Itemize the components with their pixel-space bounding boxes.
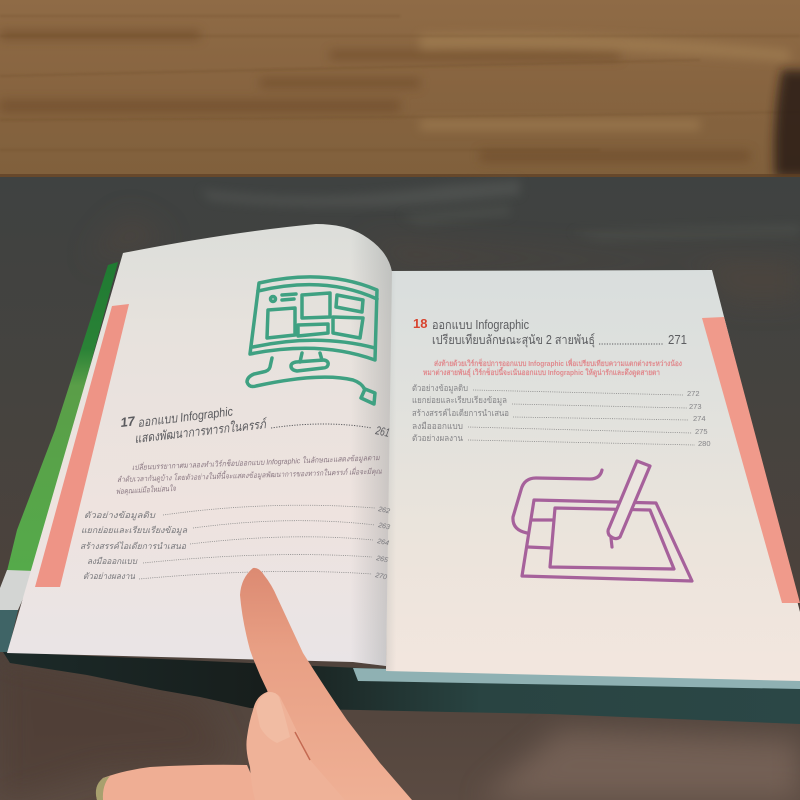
wood wall background [0, 0, 800, 177]
contents list chapter 18 [412, 383, 711, 448]
contents list chapter 17: ลงมือออกแบบ [87, 556, 138, 566]
contents list chapter 18: ตัวอย่างผลงาน [412, 433, 463, 443]
text block: chapter 18 intro: ส่งท้ายด้วยเวิร์กช็อปการออกแบบ Infographic เพื่อเปรียบเทียบความแตกต่างระหว่างน้อง [434, 357, 682, 368]
icon: drawing tablet and pen [513, 461, 692, 581]
contents list chapter 17: สร้างสรรค์ไอเดียการนำเสนอ [80, 541, 187, 551]
contents list chapter 17: 264 [376, 538, 390, 547]
text block: chapter 17 intro [116, 452, 383, 496]
heading: chapter 17: ออกแบบ Infographic [137, 404, 234, 430]
pink stripe right [702, 317, 800, 603]
contents list chapter 18: 280 [698, 439, 711, 448]
cover green edge left [7, 262, 118, 572]
panel: left page [7, 224, 392, 666]
heading: chapter 17 [120, 404, 391, 446]
contents list chapter 17 [80, 505, 391, 581]
hand with pointing finger [96, 568, 412, 800]
panel: right page [386, 270, 800, 681]
book cover and shadow [0, 262, 800, 724]
contents list chapter 18: 275 [695, 427, 708, 436]
text block: chapter 17 intro: ลำดับเวลากันดูบ้าง โดยตัวอย่างในที่นี้จะแสดงข้อมูลพัฒนาการของทารกในครรภ์ เผื่อจะมีคุณ [117, 466, 383, 484]
contents list chapter 17: แยกย่อยและเรียบเรียงข้อมูล [81, 525, 188, 536]
cover teal edge right [353, 668, 800, 689]
heading: chapter 18: 18 [413, 316, 427, 331]
shadow under book [3, 652, 800, 724]
contents list chapter 17: 270 [374, 572, 388, 581]
heading: chapter 18: ออกแบบ Infographic [432, 318, 529, 332]
brown floor lower right [480, 730, 800, 800]
contents list chapter 17: 265 [375, 555, 389, 564]
text block: chapter 18 intro [423, 357, 682, 378]
fingernail on second finger [256, 692, 290, 743]
second finger [246, 692, 345, 800]
heading: chapter 18: เปรียบเทียบลักษณะสุนัข 2 สายพันธุ์ [432, 333, 595, 348]
contents list chapter 18: แยกย่อยและเรียบเรียงข้อมูล [412, 395, 507, 406]
contents list chapter 17: 262 [377, 506, 391, 515]
contents list chapter 18: ลงมือออกแบบ [412, 421, 463, 431]
text block: chapter 18 intro: หมาต่างสายพันธุ์ เวิร์กช็อปนี้จะเน้นออกแบบ Infographic ให้ดูน่ารักและดึงดูดสายตา [423, 366, 660, 378]
fingernail on bottom finger [96, 776, 110, 800]
contents list chapter 18: ตัวอย่างข้อมูลดิบ [412, 383, 468, 394]
contents list chapter 17: ตัวอย่างข้อมูลดิบ [84, 510, 156, 521]
heading: chapter 17: 261 [374, 423, 391, 440]
text block: chapter 17 intro: เปลี่ยนบรรยากาศมาลองทำเวิร์กช็อปออกแบบ Infographic ในลักษณะแสดงข้อมูลตาม [132, 452, 381, 472]
heading: chapter 17: แสดงพัฒนาการทารกในครรภ์ [134, 416, 269, 446]
heading: chapter 17: 17 [120, 413, 136, 430]
contents list chapter 18: 272 [687, 389, 700, 398]
page block left [0, 570, 35, 610]
index finger [240, 568, 412, 800]
text block: chapter 17 intro: พ่อคุณแม่มือใหม่สนใจ [116, 484, 177, 496]
crease between fingers [295, 732, 310, 760]
pink stripe left [35, 304, 129, 587]
contents list chapter 17: 263 [377, 522, 391, 531]
icon: desktop monitor [247, 277, 377, 404]
dark table surface [0, 177, 800, 800]
contents list chapter 18: 274 [693, 414, 706, 423]
bottom finger [96, 765, 262, 800]
heading: chapter 18 [413, 316, 687, 348]
contents list chapter 18: สร้างสรรค์ไอเดียการนำเสนอ [412, 408, 509, 418]
contents list chapter 17: ตัวอย่างผลงาน [83, 571, 135, 581]
cover teal corner left [0, 610, 18, 652]
heading: chapter 18: 271 [668, 333, 687, 347]
contents list chapter 18: 273 [689, 402, 702, 411]
